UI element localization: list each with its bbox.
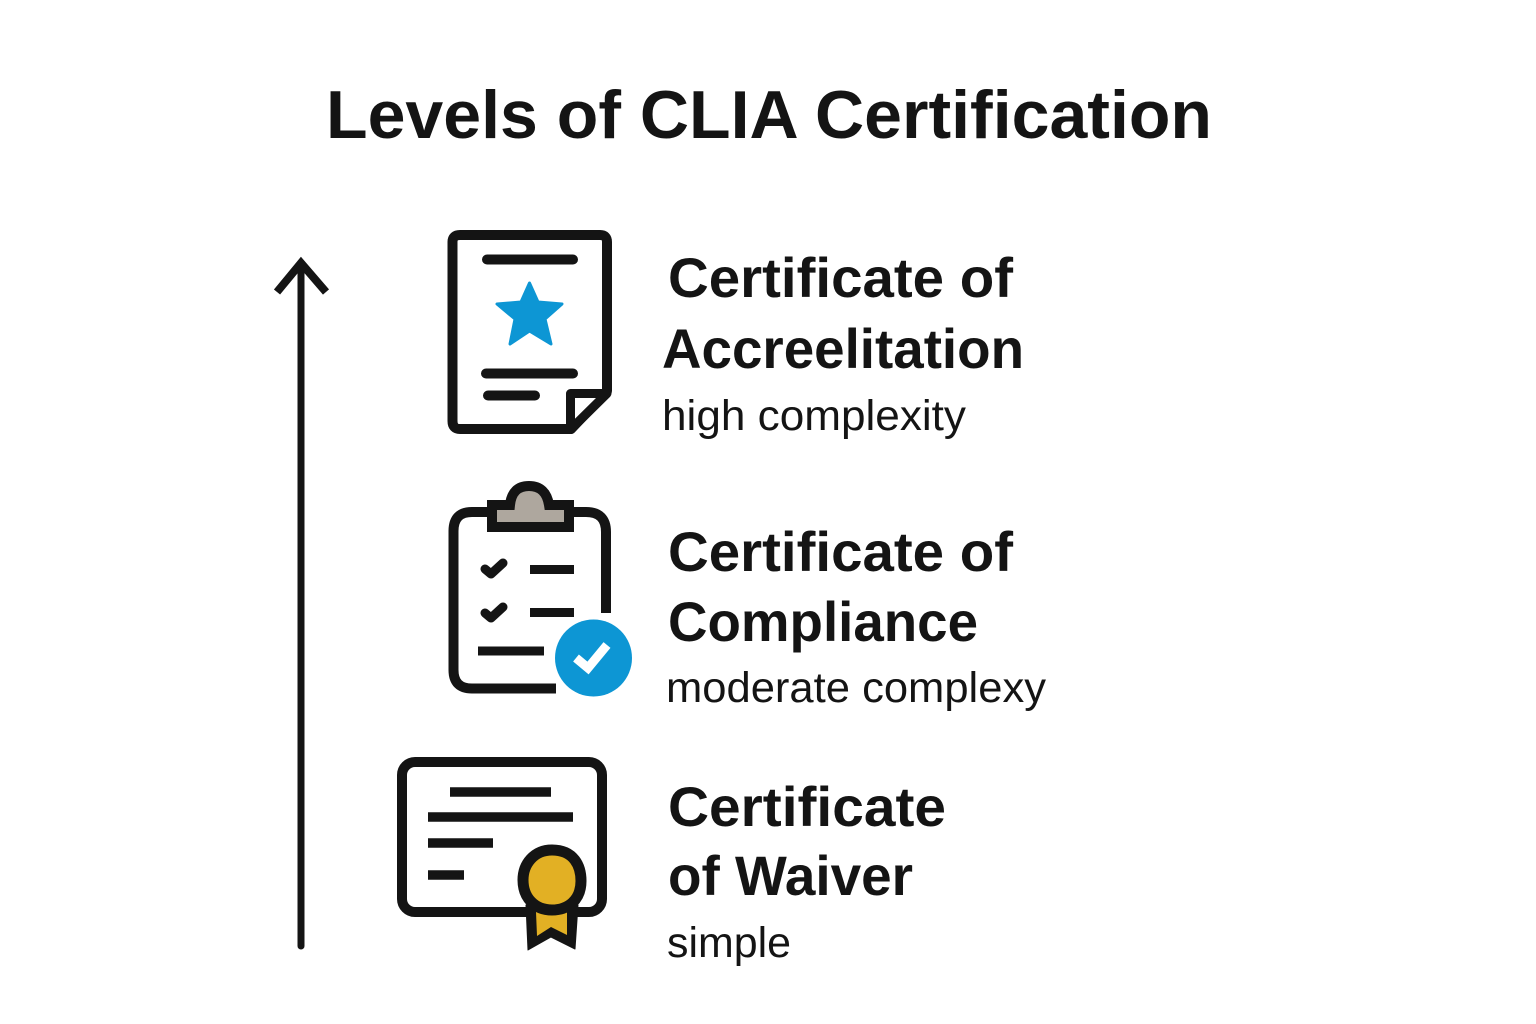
heading: certificate of compliance: Certificate of: [668, 520, 1013, 583]
icon: clipboard checklist: [454, 486, 632, 696]
caption: simple: simple: [667, 919, 791, 967]
arrow: increasing complexity: [277, 263, 326, 946]
heading: certificate of waiver: Certificate: [668, 775, 946, 838]
caption: moderate complexity: moderate complexy: [666, 664, 1046, 712]
heading: certificate of accreditation: [662, 246, 1024, 380]
title: Levels of CLIA Certification: [326, 77, 1212, 153]
icon: blue check badge: [555, 620, 632, 696]
icon: certificate of waiver diploma: [402, 762, 602, 950]
icon: certificate of accreditation document: [452, 235, 607, 429]
icon: gold ribbon seal: [523, 850, 581, 950]
caption: high complexity: high complexity: [662, 392, 966, 440]
heading: certificate of accreditation: Accreelitation: [662, 317, 1024, 380]
heading: certificate of accreditation: Certificate of: [668, 246, 1013, 309]
icon: clipboard clip: [492, 486, 569, 527]
heading: certificate of compliance: [668, 520, 1013, 653]
heading: certificate of compliance: Compliance: [668, 590, 978, 653]
heading: certificate of waiver: [668, 775, 946, 907]
icon: blue star: [497, 283, 562, 344]
heading: certificate of waiver: of Waiver: [668, 844, 913, 907]
